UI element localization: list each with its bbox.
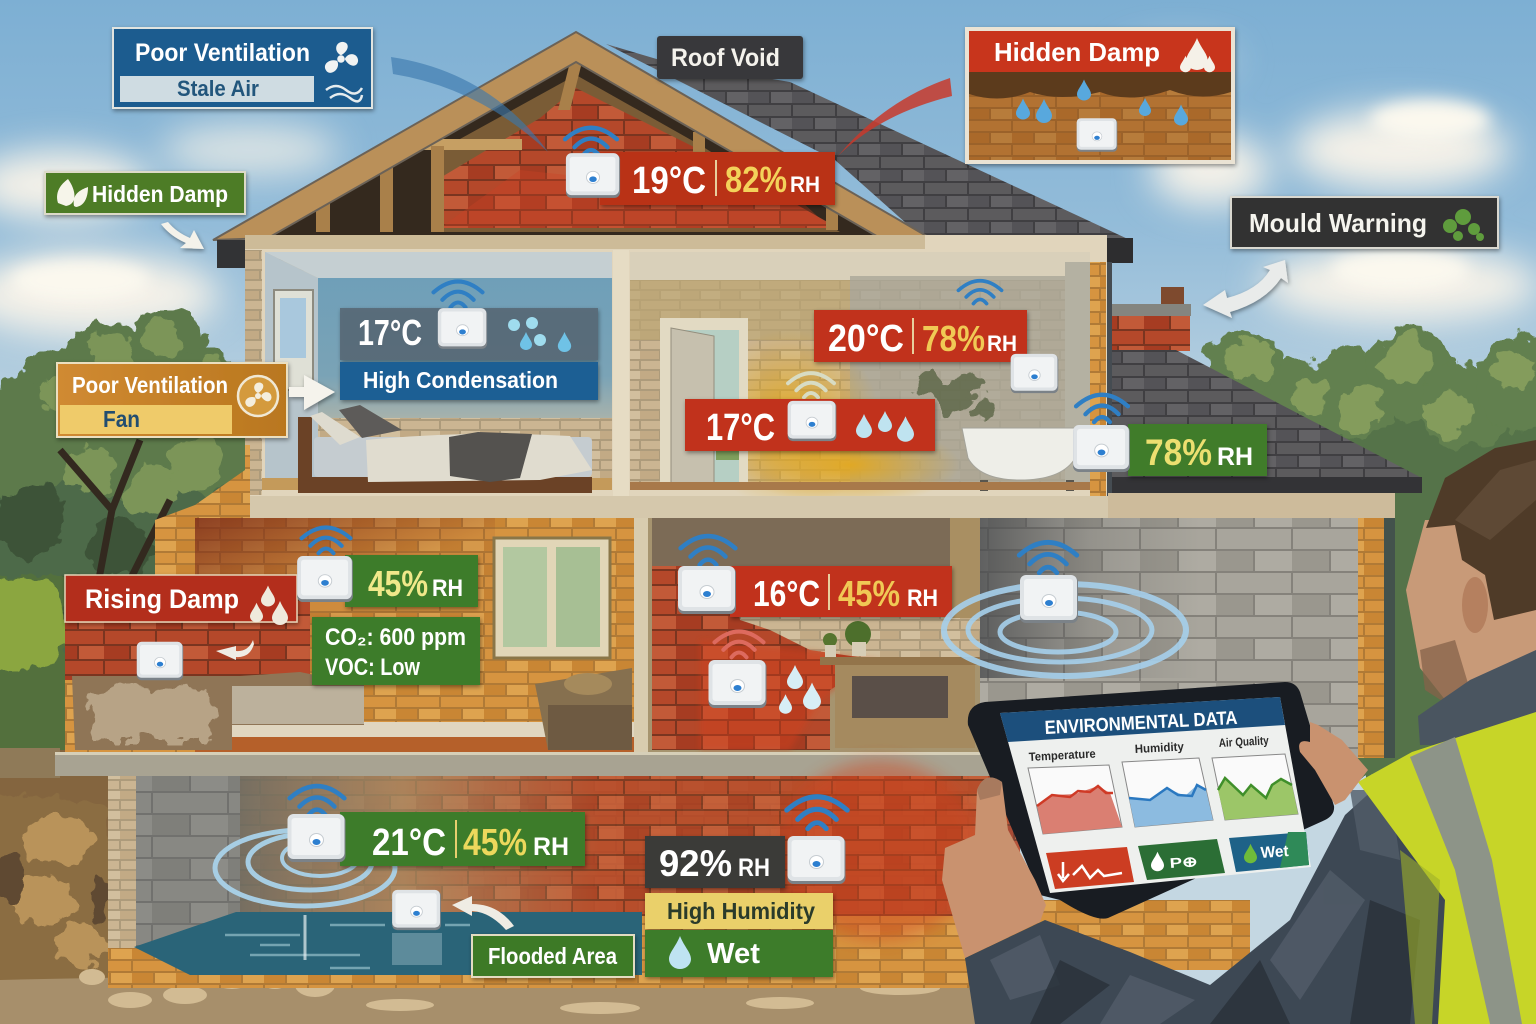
chart: air quality: Air Quality	[1218, 733, 1269, 750]
tablet	[968, 682, 1334, 919]
damaged plaster	[72, 672, 364, 750]
reading: kitchen 16C 45% RH: 16°C	[753, 573, 820, 614]
flood water	[134, 912, 642, 975]
sensor: grey wall with signal rings	[944, 542, 1186, 676]
tablet header: ENVIRONMENTAL DATA	[1044, 708, 1238, 739]
icon: fan	[238, 376, 278, 416]
trees	[0, 307, 1536, 780]
sofa	[535, 668, 632, 750]
label: Poor Ventilation / Stale Air: Poor Ventilation	[135, 39, 310, 67]
head	[1406, 440, 1536, 706]
window	[494, 538, 610, 658]
bedroom	[262, 252, 612, 493]
tablet header	[1000, 697, 1285, 742]
panel: 92% RH High Humidity Wet: High Humidity	[667, 898, 815, 924]
arrow: hidden damp to eave	[161, 222, 204, 249]
bed	[298, 405, 592, 493]
callout pointer lines	[391, 57, 952, 156]
label: Roof Void: Roof Void	[671, 44, 780, 72]
icon: damp drop	[1180, 38, 1215, 72]
chart: air quality	[1212, 733, 1298, 820]
reading: basement 21C 45% RH: RH	[533, 833, 569, 861]
floor slab	[55, 752, 1055, 776]
label: Hidden Damp green: Hidden Damp	[92, 181, 228, 207]
reading: basement 21C 45% RH	[215, 786, 585, 906]
chart: humidity	[1122, 739, 1213, 827]
grey main roof	[606, 44, 1130, 240]
label: Flooded Area	[472, 935, 634, 977]
reading: basement 21C 45% RH: 45%	[463, 822, 527, 864]
gable bargeboard	[213, 32, 930, 240]
reading: kitchen 16C 45% RH	[678, 536, 952, 617]
panel: Rising Damp: Rising Damp	[85, 584, 239, 614]
reading: roof void 19C 82% RH: RH	[790, 172, 820, 197]
label: Hidden Damp green	[45, 172, 245, 214]
panel: 92% RH High Humidity Wet: Wet	[707, 938, 760, 970]
icon: drops	[856, 411, 914, 442]
panel: Hidden Damp top right: Hidden Damp	[994, 37, 1160, 67]
attic	[232, 56, 920, 236]
ground and dirt	[0, 748, 1000, 1024]
right trees	[1190, 329, 1536, 780]
left stepped brick outer wall	[65, 445, 250, 760]
left hand	[942, 778, 1046, 958]
status tile: green: P⊕	[1169, 853, 1198, 871]
status tile: green	[1138, 839, 1225, 880]
label: Mould Warning	[1231, 197, 1498, 248]
reading: 20C 78% RH: 78%	[922, 318, 985, 359]
panel: 92% RH High Humidity Wet: 92%	[659, 843, 732, 884]
upper right room	[630, 252, 1090, 510]
bathtub	[962, 428, 1074, 491]
chart: temperature	[1028, 746, 1122, 834]
left bush	[0, 575, 70, 765]
reading: 45% RH with air quality: 45%	[368, 563, 428, 604]
ground left room	[195, 518, 637, 752]
reading: 20C 78% RH	[814, 281, 1058, 393]
label: Mould Warning: Mould Warning	[1249, 208, 1427, 238]
label: Poor Ventilation Fan: Poor Ventilation	[72, 372, 228, 398]
jacket	[965, 770, 1470, 1024]
ground middle room	[648, 518, 982, 754]
right hand	[1299, 722, 1368, 805]
reading: kitchen 16C 45% RH: 45%	[838, 573, 900, 614]
arrow: flooded sensor	[452, 896, 514, 930]
hi-vis vest	[1358, 712, 1536, 1024]
reading: 45% RH with air quality: RH	[432, 575, 463, 602]
chart: temperature: Temperature	[1028, 746, 1096, 764]
panel: 92% RH High Humidity Wet	[645, 797, 847, 977]
status tile: red	[1046, 847, 1134, 889]
sensor: flooded area	[392, 890, 514, 930]
reading: bathroom 78% RH: 78%	[1145, 432, 1212, 473]
reading: roof void 19C 82% RH	[565, 128, 835, 205]
label: Poor Ventilation / Stale Air	[113, 28, 372, 108]
reading: bathroom 78% RH	[1073, 395, 1267, 476]
kitchen counter and plants	[820, 621, 980, 748]
sensor: red wall with drops	[708, 631, 821, 714]
doorway	[660, 318, 748, 490]
tablet screen	[1000, 697, 1311, 893]
chart: humidity: Humidity	[1134, 739, 1184, 756]
panel: 92% RH High Humidity Wet: RH	[738, 854, 770, 882]
arrow: ventilation to bedroom	[289, 375, 335, 410]
plant	[918, 373, 994, 419]
reading: kitchen 16C 45% RH: RH	[907, 585, 938, 612]
right extension with roof and chimney	[1108, 287, 1422, 493]
inspector figure	[965, 440, 1536, 1024]
label: Poor Ventilation Fan: Fan	[103, 406, 140, 432]
basement wall	[108, 760, 1250, 988]
arrow: mould warning	[1203, 260, 1288, 318]
label: Poor Ventilation Fan	[57, 363, 287, 437]
dirt mound	[0, 797, 130, 1024]
reading: 20C 78% RH: 20°C	[828, 318, 904, 360]
left tree	[0, 307, 255, 780]
reading: bedroom 17C High Condensation: 17°C	[358, 312, 422, 353]
reading: 45% RH with air quality: CO₂: 600 ppm	[325, 624, 466, 651]
status tile: blue	[1229, 832, 1309, 872]
label: Poor Ventilation / Stale Air: Stale Air	[177, 76, 259, 101]
reading: 45% RH with air quality	[297, 527, 480, 685]
icon: condensation drops	[508, 317, 546, 346]
reading: 45% RH with air quality: VOC: Low	[325, 654, 420, 681]
reading: bedroom 17C High Condensation: High Condensation	[363, 367, 558, 393]
reading: basement 21C 45% RH: 21°C	[372, 822, 446, 864]
arrow: rising damp	[216, 640, 254, 660]
bedroom window	[274, 290, 313, 390]
reading: roof void 19C 82% RH: 19°C	[632, 160, 706, 202]
label: Roof Void	[657, 36, 803, 79]
grey block wall	[980, 518, 1384, 758]
status tile: blue: Wet	[1260, 843, 1290, 862]
reading: roof void 19C 82% RH: 82%	[725, 159, 787, 200]
reading: hallway 17C: 17°C	[706, 407, 775, 449]
red damaged brick	[652, 566, 878, 750]
jacket collar	[1418, 650, 1536, 745]
label: Flooded Area: Flooded Area	[488, 943, 617, 969]
reading: hallway 17C	[685, 373, 935, 451]
panel: Hidden Damp top right	[965, 27, 1235, 164]
reading: bedroom 17C High Condensation	[340, 281, 598, 400]
panel: Rising Damp	[65, 575, 364, 750]
icon: mould	[1443, 209, 1484, 241]
upper floor frame	[245, 235, 1107, 503]
inspector hands	[942, 722, 1368, 958]
reading: bathroom 78% RH: RH	[1217, 443, 1253, 471]
reading: 20C 78% RH: RH	[987, 331, 1017, 356]
